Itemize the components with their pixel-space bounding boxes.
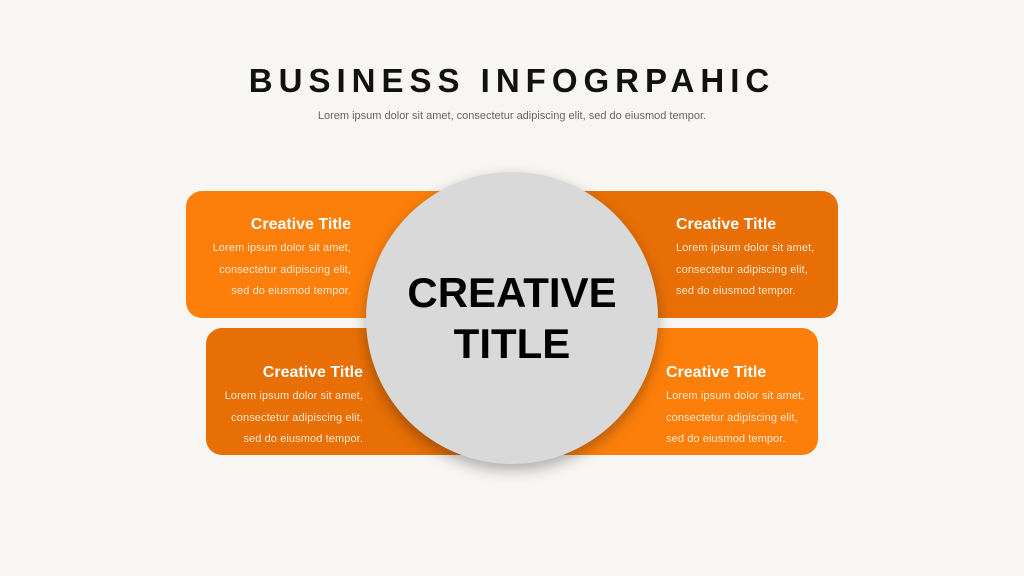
center circle (366, 172, 658, 464)
panel: bottom left (206, 328, 476, 455)
text: top right: Creative Title (676, 216, 776, 233)
text: bottom left: sed do eiusmod tempor. (243, 433, 363, 445)
text: top right: sed do eiusmod tempor. (676, 285, 796, 297)
center circle: CREATIVE (407, 269, 617, 316)
text: top left (213, 216, 351, 297)
panel: top left (186, 191, 466, 318)
text: bottom right: Lorem ipsum dolor sit amet, (666, 390, 804, 402)
text: top right: consectetur adipiscing elit, (676, 264, 808, 276)
panel: bottom right (550, 328, 818, 455)
text: top left: sed do eiusmod tempor. (231, 285, 351, 297)
text: top left: Lorem ipsum dolor sit amet, (213, 242, 351, 254)
title: BUSINESS INFOGRPAHIC (249, 62, 775, 99)
text: bottom right (666, 364, 804, 445)
text: bottom left: Creative Title (263, 364, 363, 381)
text: bottom right: sed do eiusmod tempor. (666, 433, 786, 445)
text: top left: Creative Title (251, 216, 351, 233)
text: top right (676, 216, 814, 297)
text: bottom left (225, 364, 363, 445)
center circle: TITLE (454, 320, 570, 367)
text: bottom left: consectetur adipiscing elit, (231, 412, 363, 424)
subtitle: Lorem ipsum dolor sit amet, consectetur adipiscing elit, sed do eiusmod tempor. (318, 110, 706, 122)
text: top left: consectetur adipiscing elit, (219, 264, 351, 276)
panel: top right (560, 191, 838, 318)
text: top right: Lorem ipsum dolor sit amet, (676, 242, 814, 254)
text: bottom left: Lorem ipsum dolor sit amet, (225, 390, 363, 402)
text: bottom right: Creative Title (666, 364, 766, 381)
text: bottom right: consectetur adipiscing elit, (666, 412, 798, 424)
